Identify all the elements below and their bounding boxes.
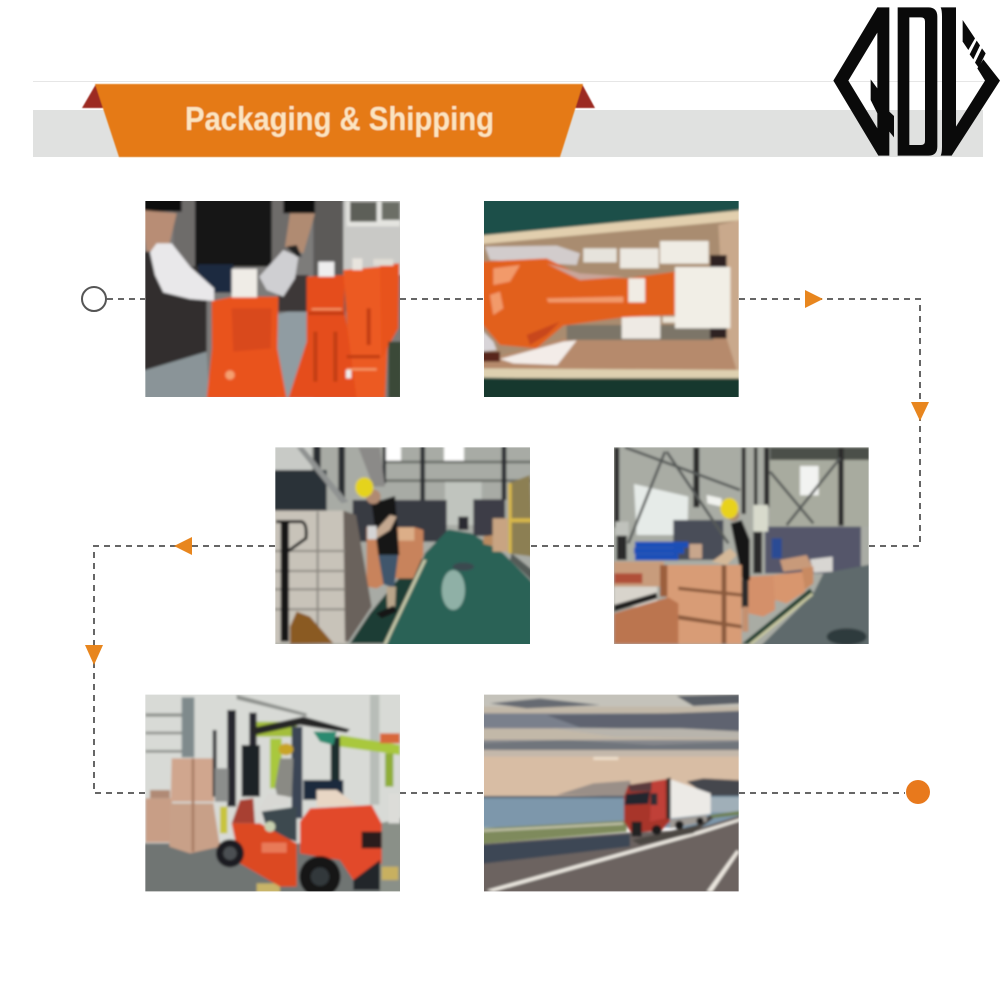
title banner bbox=[82, 84, 595, 157]
photo: worker checking crates in factory bbox=[614, 447, 869, 644]
banner fold: right bbox=[574, 84, 595, 108]
title: Packaging & Shipping bbox=[185, 100, 494, 137]
arrow: right bbox=[805, 290, 823, 308]
start circle bbox=[82, 287, 106, 311]
arrow: left bbox=[174, 537, 192, 555]
logo bbox=[833, 7, 1000, 156]
photo: forklift carrying crates bbox=[145, 694, 400, 892]
end circle bbox=[906, 780, 930, 804]
arrow: down right side bbox=[911, 402, 929, 421]
header background band bbox=[33, 81, 985, 157]
banner ribbon bbox=[95, 84, 583, 157]
process flow connector bbox=[94, 299, 920, 793]
photo: gloved worker with orange hammers bbox=[145, 201, 400, 397]
photo: truck on coastal road bbox=[484, 694, 739, 892]
photo: hammer packed in wooden crate bbox=[484, 201, 739, 397]
photo: worker strapping pallet in warehouse bbox=[275, 447, 530, 644]
arrow: down left side bbox=[85, 645, 103, 665]
banner fold: left bbox=[82, 84, 105, 108]
